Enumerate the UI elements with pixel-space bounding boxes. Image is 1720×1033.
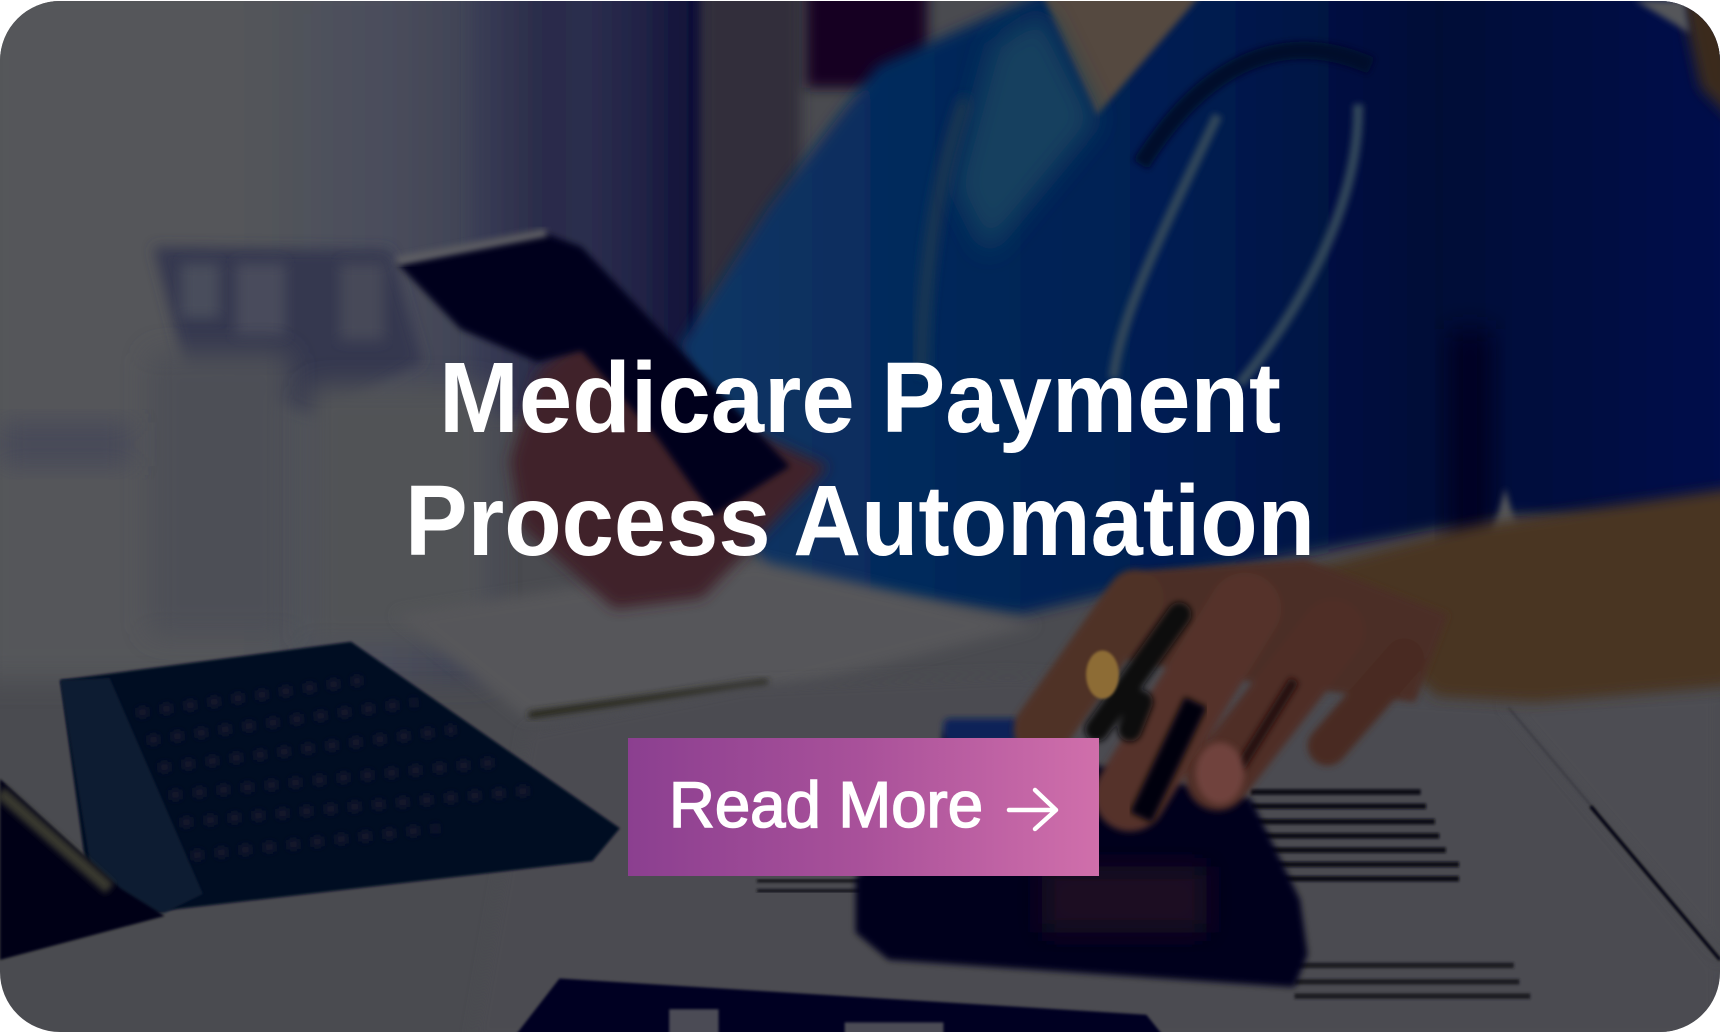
read more button: [628, 738, 1099, 876]
title: Process Automation: [405, 465, 1315, 577]
title: Medicare Payment: [439, 342, 1281, 454]
read more button: Read More: [669, 768, 983, 841]
icon: arrow: [1009, 790, 1056, 829]
title: [405, 342, 1315, 577]
